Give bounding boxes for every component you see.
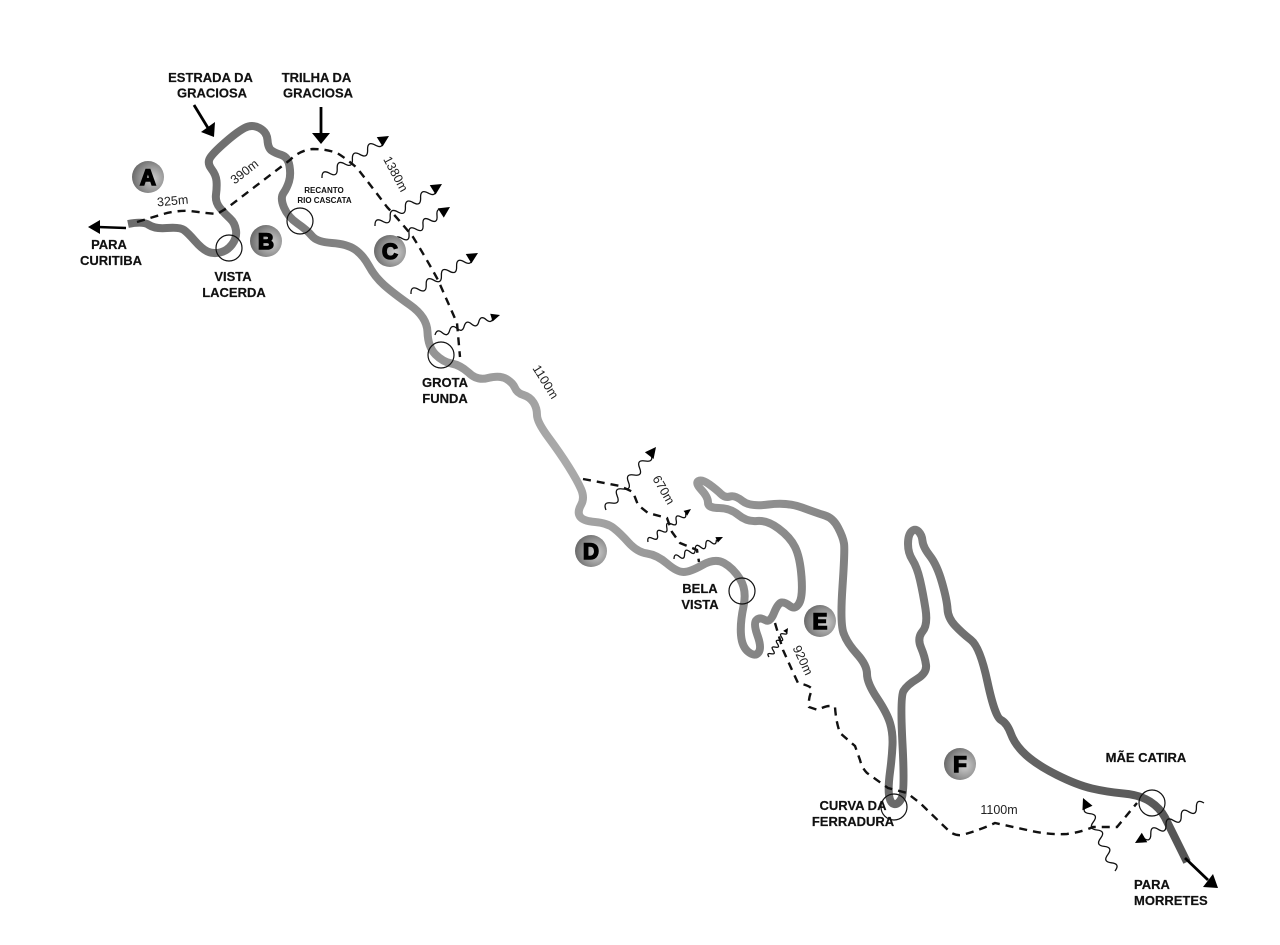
section badge B: B: [258, 229, 274, 254]
label: Para Curitiba: PARA: [91, 237, 127, 252]
river: wavy crossing 1: [322, 131, 392, 178]
river: wavy crossing 7: [648, 507, 693, 542]
arrow: para Curitiba: [88, 220, 126, 234]
marker: Mãe Catira: [1139, 790, 1165, 816]
river: wavy crossing 8: [674, 534, 724, 559]
section badge C: C: [382, 239, 398, 264]
section badge D: [575, 535, 607, 567]
label: Para Morretes: PARA: [1134, 877, 1170, 892]
section badge E: [804, 605, 836, 637]
label: Trilha da Graciosa: GRACIOSA: [283, 86, 354, 100]
river: wavy crossing 6: [605, 444, 660, 510]
section badge F: F: [953, 752, 967, 777]
river: wavy crossing 9: [768, 627, 790, 657]
dashed trail: lower section: [775, 623, 1137, 835]
marker: Recanto Rio Cascata: [287, 208, 313, 234]
section badge C: [374, 235, 406, 267]
section badge B: [250, 225, 282, 257]
label: Trilha da Graciosa: TRILHA DA: [282, 70, 351, 85]
label: Curva da Ferradura: FERRADURA: [812, 814, 895, 829]
label: Vista Lacerda: VISTA: [214, 269, 252, 284]
section badge A: A: [140, 165, 156, 190]
river: wavy crossing 10: [1078, 796, 1117, 871]
label: Recanto Rio Cascata: RIO CASCATA: [297, 196, 352, 205]
label: Para Curitiba: CURITIBA: [80, 253, 143, 268]
label: Bela Vista: VISTA: [681, 597, 719, 612]
marker: Curva da Ferradura: [881, 794, 907, 820]
label: Estrada da Graciosa: ESTRADA DA: [168, 70, 253, 85]
section badge F: [944, 748, 976, 780]
dashed trail: middle section: [583, 479, 699, 562]
dashed trail: upper section: [137, 149, 460, 357]
marker: Grota Funda: [428, 342, 454, 368]
label: Grota Funda: FUNDA: [422, 391, 468, 406]
distance: 670m: 670m: [650, 473, 677, 507]
distance: 1100m upper: 1100m: [530, 362, 561, 401]
label: Vista Lacerda: LACERDA: [202, 285, 266, 300]
label: Grota Funda: GROTA: [422, 375, 468, 390]
label: Estrada da Graciosa: GRACIOSA: [177, 86, 248, 100]
distance: 920m: 920m: [790, 643, 816, 677]
road: Estrada da Graciosa: [128, 126, 1187, 862]
river: wavy crossing 5: [435, 311, 501, 335]
section badge D: D: [583, 539, 599, 564]
river: wavy crossing 4: [411, 248, 481, 294]
distance: 1380m: 1380m: [380, 154, 411, 194]
arrow: para Morretes: [1185, 858, 1218, 888]
label: Curva da Ferradura: CURVA DA: [820, 798, 886, 813]
label: Recanto Rio Cascata: RECANTO: [304, 186, 344, 195]
river: wavy crossing 11: [1132, 801, 1204, 848]
marker: Bela Vista: [729, 578, 755, 604]
distance: 1100m lower: 1100m: [980, 803, 1018, 817]
river: wavy crossing 2: [375, 179, 445, 226]
arrow: Estrada da Graciosa: [194, 105, 215, 137]
distance: 390m: 390m: [228, 157, 261, 187]
distance: 325m: 325m: [156, 193, 189, 209]
section badge A: [132, 161, 164, 193]
label: Para Morretes: MORRETES: [1134, 893, 1208, 908]
section badge E: E: [813, 609, 827, 634]
marker: Vista Lacerda: [216, 235, 242, 261]
arrow: Trilha da Graciosa: [312, 107, 330, 144]
river: wavy crossing 3: [395, 202, 453, 243]
label: Bela Vista: BELA: [682, 581, 718, 596]
label: Mãe Catira: MÃE CATIRA: [1106, 750, 1187, 765]
